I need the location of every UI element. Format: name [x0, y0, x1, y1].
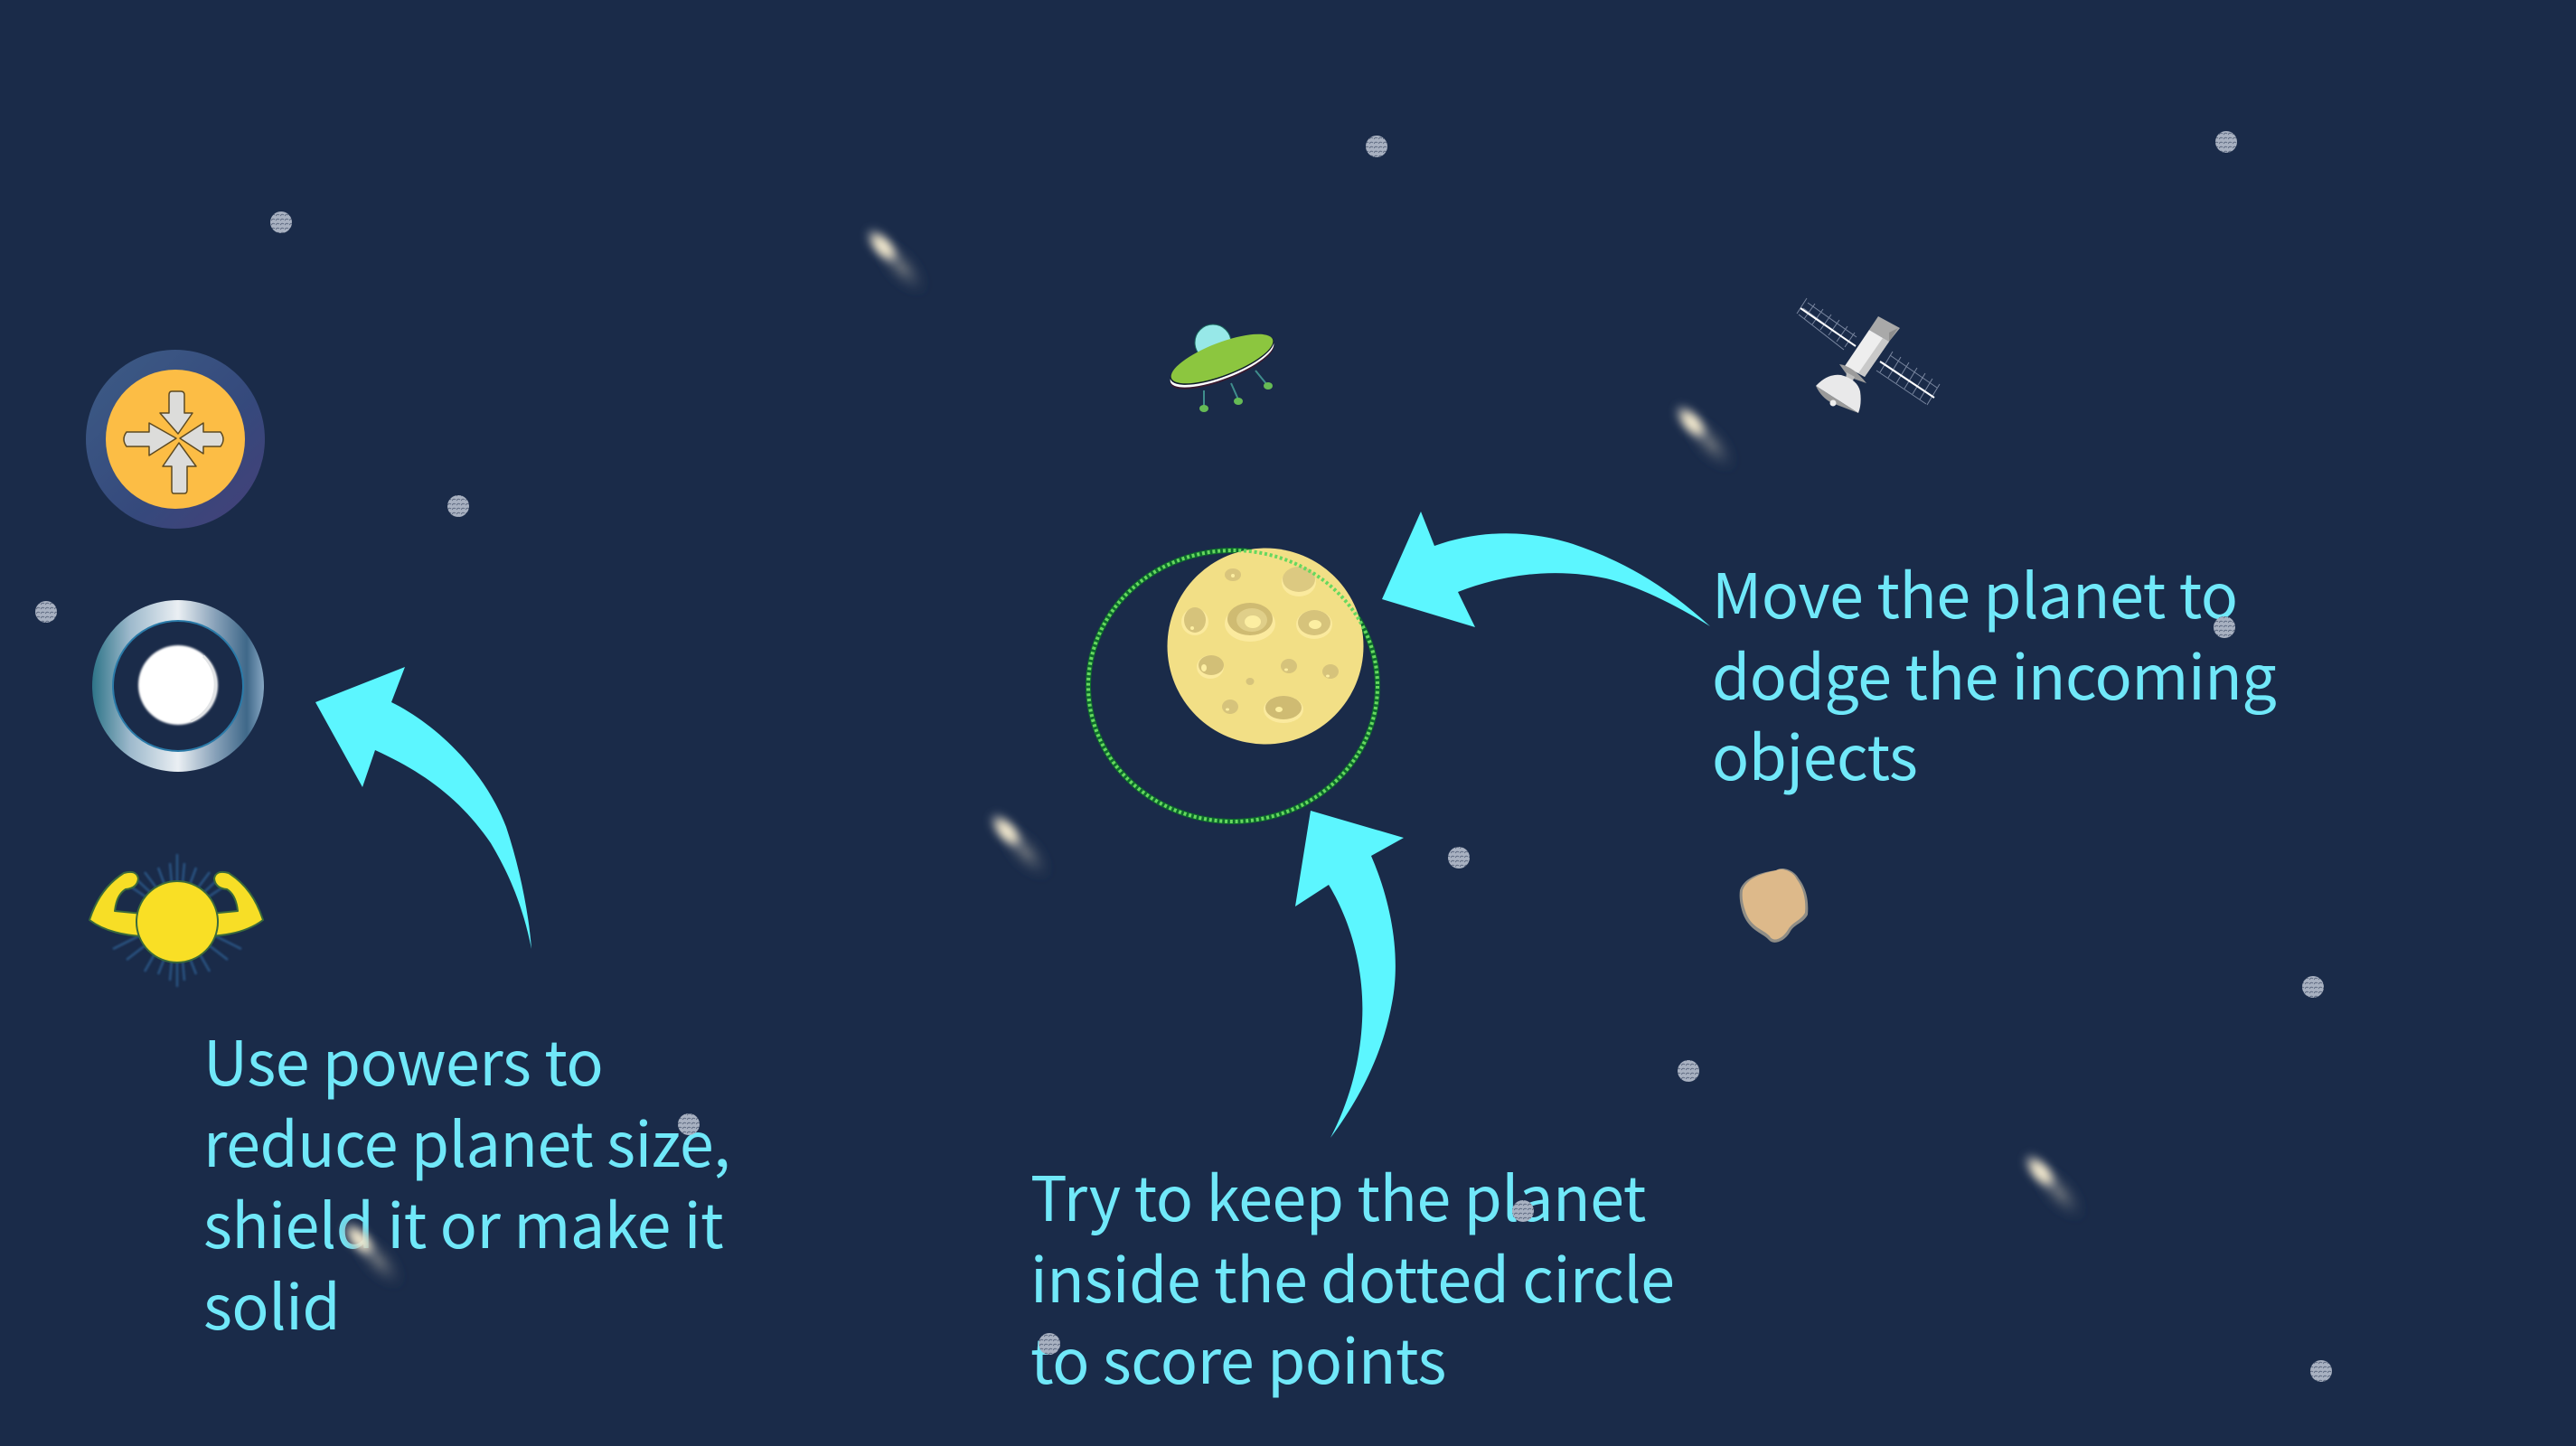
background stars [35, 131, 2332, 1382]
text: use powers: reduce planet size, [203, 1095, 730, 1185]
icon: solid power [89, 854, 263, 987]
galaxies [328, 214, 2098, 1300]
text: use powers: shield it or make it [203, 1177, 723, 1266]
arrow: to planet [1382, 512, 1710, 627]
text: use powers: solid [203, 1258, 340, 1347]
icon: shield power [92, 600, 264, 772]
text: dotted circle: Try to keep the planet [1030, 1150, 1646, 1239]
arrow: to powers [315, 667, 531, 949]
planet with craters [1168, 548, 1363, 745]
icon: ufo [1164, 324, 1280, 412]
text: dotted circle: inside the dotted circle [1030, 1231, 1675, 1320]
text: move the planet: Move the planet to [1712, 547, 2238, 636]
icon: asteroid [1740, 869, 1808, 943]
text: dotted circle [1030, 1150, 1675, 1402]
icon: satellite [1797, 298, 1940, 413]
icon: shrink power [86, 350, 265, 529]
text: move the planet: objects [1712, 709, 1917, 798]
text: move the planet: dodge the incoming [1712, 628, 2276, 718]
text: dotted circle: to score points [1030, 1312, 1446, 1402]
text: use powers: Use powers to [203, 1014, 603, 1103]
dotted target circle [1088, 550, 1377, 822]
text: move the planet [1712, 547, 2276, 798]
arrow: to dotted circle [1295, 811, 1404, 1138]
text: use powers [203, 1014, 730, 1347]
